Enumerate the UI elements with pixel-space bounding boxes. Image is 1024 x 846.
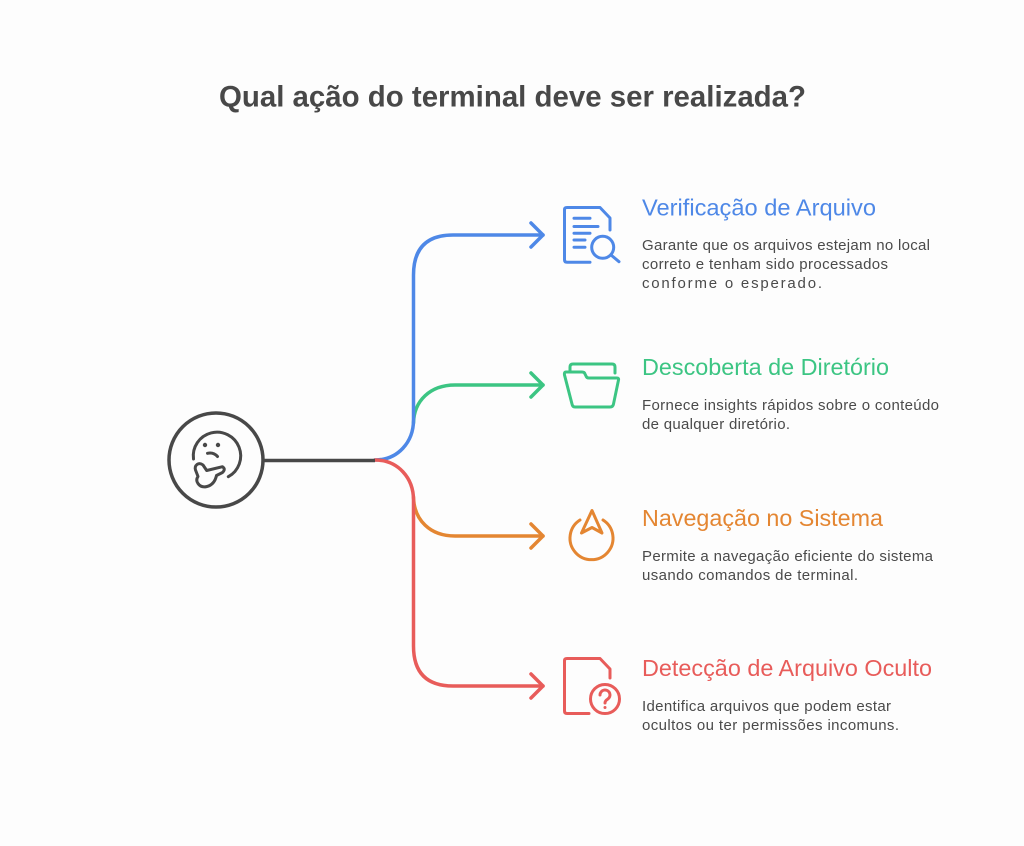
connector: red branch	[375, 460, 543, 698]
item: Verificação de Arquivo	[564, 194, 930, 292]
title: Qual ação do terminal deve ser realizada?	[219, 80, 806, 114]
connector: orange branch	[414, 497, 543, 548]
description: Navegação no Sistema: Permite a navegação eficiente do sistema	[642, 548, 934, 565]
icon: open folder	[564, 364, 619, 407]
icon: document with question mark	[564, 658, 620, 714]
connector: central trunk	[264, 459, 375, 462]
item: Navegação no Sistema	[570, 505, 934, 584]
description: Verificação de Arquivo: correto e tenham sido processados	[642, 256, 888, 273]
heading: Navegação no Sistema: Navegação no Sistema	[642, 505, 884, 531]
description: Descoberta de Diretório: Fornece insights rápidos sobre o conteúdo	[642, 397, 939, 414]
connector: blue branch	[375, 223, 543, 460]
description: Navegação no Sistema	[642, 548, 934, 584]
description: Verificação de Arquivo: Garante que os arquivos estejam no local	[642, 237, 930, 254]
description: Verificação de Arquivo	[642, 237, 930, 292]
item: Detecção de Arquivo Oculto	[564, 655, 932, 734]
description: Detecção de Arquivo Oculto	[642, 698, 899, 734]
description: Descoberta de Diretório	[642, 397, 939, 433]
item: Descoberta de Diretório	[564, 354, 939, 433]
heading: Detecção de Arquivo Oculto: Detecção de Arquivo Oculto	[642, 655, 932, 681]
description: Detecção de Arquivo Oculto: ocultos ou ter permissões incomuns.	[642, 717, 899, 734]
heading: Verificação de Arquivo: Verificação de Arquivo	[642, 194, 876, 220]
icon: navigation compass	[570, 510, 613, 560]
icon: thinking face	[169, 413, 263, 507]
connector: green branch	[414, 373, 543, 423]
description: Verificação de Arquivo: conforme o esperado.	[642, 275, 822, 292]
icon: document with magnifier	[564, 208, 619, 262]
description: Detecção de Arquivo Oculto: Identifica arquivos que podem estar	[642, 698, 891, 715]
heading: Descoberta de Diretório: Descoberta de Diretório	[642, 354, 889, 380]
description: Descoberta de Diretório: de qualquer diretório.	[642, 416, 790, 433]
description: Navegação no Sistema: usando comandos de terminal.	[642, 567, 858, 584]
